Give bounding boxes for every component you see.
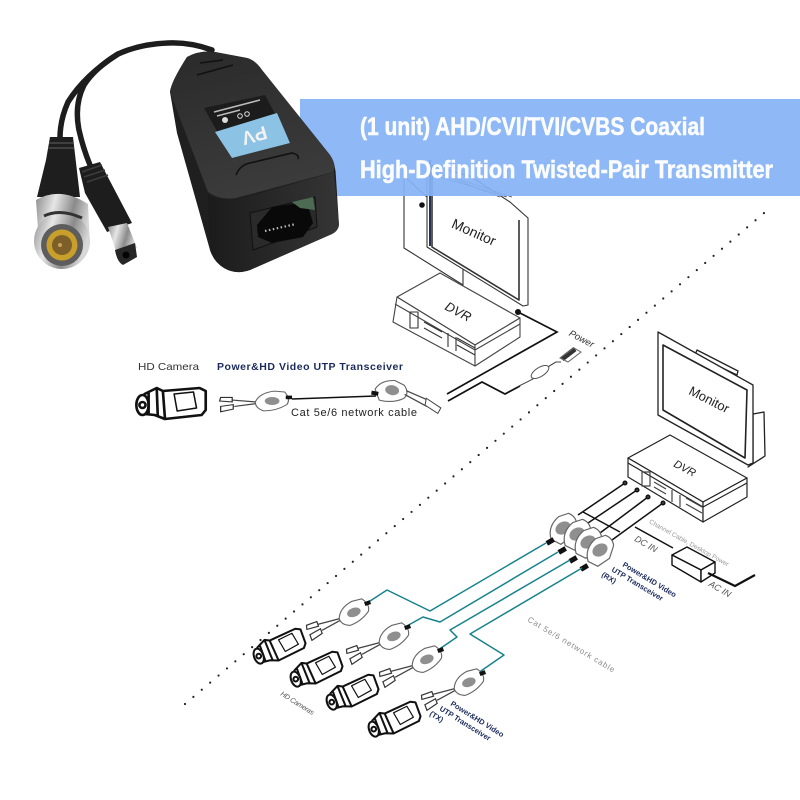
camera, left [136, 388, 206, 419]
device body [170, 52, 339, 272]
label: TX transceiver: UTP Transceiver [438, 704, 493, 743]
DC connector [79, 162, 137, 265]
divider: dotted diagonal [185, 208, 770, 704]
power adapter [672, 547, 755, 586]
label: adapter note: Channel Cable, Desktop Power [648, 519, 731, 569]
diagram: four camera system [250, 332, 765, 743]
label: RX transceiver [600, 560, 678, 603]
transceiver, DVR side [370, 377, 444, 414]
monitor, upper [404, 160, 528, 306]
label: AC IN: AC IN [706, 578, 733, 600]
network cable [292, 396, 376, 399]
power cables [447, 312, 557, 401]
label: Cat 5e/6 network cable: Cat 5e/6 network cable [526, 615, 617, 674]
label: Monitor: Monitor [687, 383, 733, 416]
banner [300, 99, 800, 196]
monitor, lower [658, 332, 765, 467]
cameras [250, 627, 423, 741]
device label [204, 95, 290, 158]
label: HD Camera: HD Camera [138, 361, 199, 373]
label: TX transceiver: Power&HD Video [449, 699, 506, 739]
label: DC IN: DC IN [633, 534, 660, 555]
label: HD Cameras: HD Cameras [279, 691, 315, 717]
label: Monitor: Monitor [449, 215, 499, 249]
power connector [515, 309, 581, 387]
product photo: transceiver [34, 43, 339, 272]
label: RX transceiver: (RX) [600, 570, 618, 586]
label: Cat 5e/6 network cable: Cat 5e/6 network cable [291, 407, 417, 419]
cables [60, 43, 212, 165]
label: RX transceiver: UTP Transceiver [610, 565, 665, 603]
label: TX transceiver [428, 699, 506, 743]
RJ45 port [250, 197, 317, 250]
label: TX transceiver: (TX) [428, 709, 445, 725]
banner title line 1: (1 unit) AHD/CVI/TVI/CVBS Coaxial [360, 113, 705, 141]
label text: PV: PV [239, 121, 269, 148]
receivers (RX) [543, 510, 620, 572]
teal cat5 cables [367, 543, 582, 673]
transceiver, camera side [220, 391, 292, 412]
label: DVR: DVR [671, 458, 698, 480]
label: RX transceiver: Power&HD Video [621, 560, 678, 599]
transmitters (TX) [303, 595, 491, 711]
black video cables [578, 481, 673, 548]
label: Power: Power [567, 328, 596, 351]
label: Power&HD Video UTP Transceiver: Power&HD Video UTP Transceiver [217, 361, 403, 373]
DVR box [628, 435, 747, 522]
label: DVR: DVR [443, 298, 474, 325]
BNC connector [34, 137, 90, 269]
diagram: single DVR link [136, 160, 596, 419]
DVR box [393, 273, 520, 366]
